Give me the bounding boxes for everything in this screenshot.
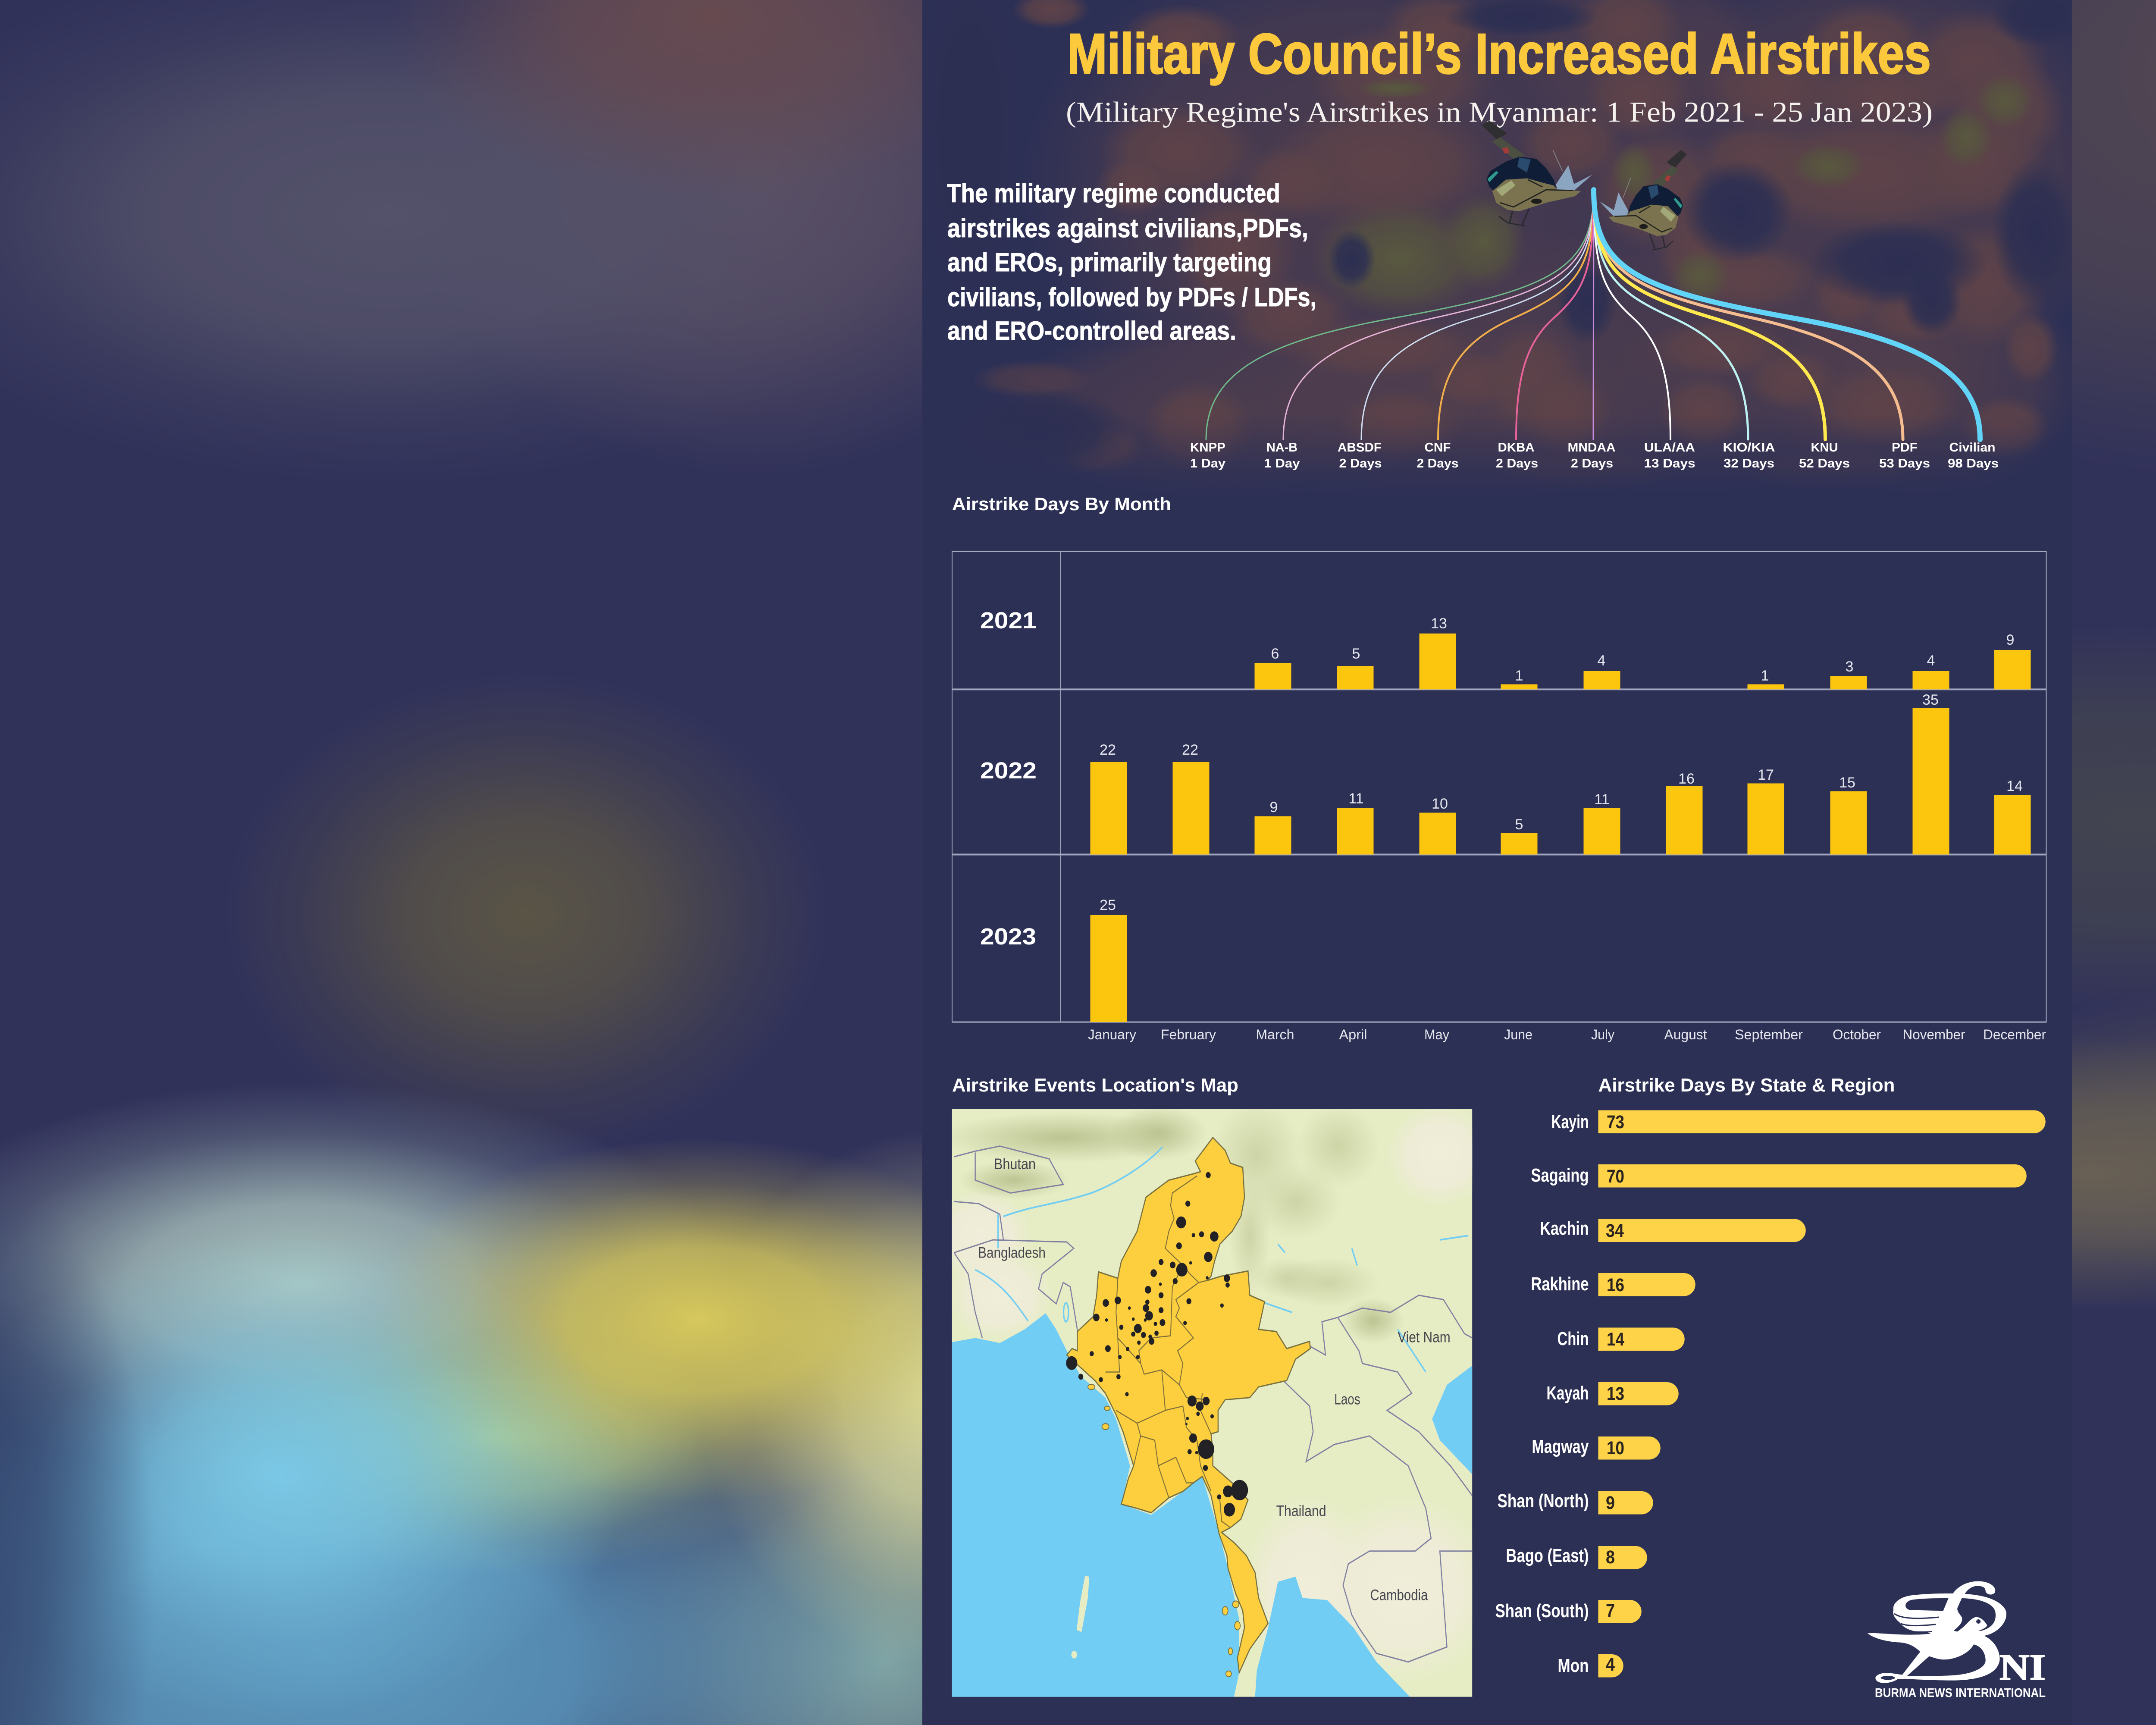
- bar value labels: 16: [1678, 771, 1695, 787]
- target labels: 1 Day: [1190, 457, 1225, 470]
- bar value labels: 22: [1182, 742, 1198, 758]
- target labels: 2 Days: [1417, 457, 1458, 470]
- target labels: 1 Day: [1264, 457, 1300, 470]
- map place labels: Cambodia: [1370, 1586, 1428, 1603]
- target labels: KNU: [1811, 441, 1838, 455]
- region labels: Sagaing: [1531, 1165, 1589, 1186]
- bar value labels: 5: [1515, 816, 1523, 833]
- month labels: [1088, 1027, 2046, 1042]
- bar value labels: 11: [1348, 790, 1364, 807]
- target labels: 32 Days: [1724, 457, 1774, 470]
- panel background: [922, 0, 2072, 1725]
- subtitle: (Military Regime's Airstrikes in Myanmar: 1 Feb 2021 - 25 Jan 2023): [1066, 96, 1933, 128]
- year labels: 2022: [980, 758, 1037, 784]
- bar value labels: 14: [2006, 778, 2023, 794]
- region labels: [1495, 1111, 1589, 1676]
- target labels: 52 Days: [1799, 457, 1850, 470]
- chart: airstrike days by state and region: [1495, 1110, 2046, 1678]
- cloud and fire backdrop: [918, 0, 2143, 513]
- map place labels: Thailand: [1276, 1502, 1326, 1519]
- bar values: 14: [1607, 1329, 1624, 1350]
- intro paragraph: civilians, followed by PDFs / LDFs,: [947, 282, 1316, 312]
- month labels: July: [1591, 1027, 1614, 1042]
- map place labels: [978, 1155, 1451, 1603]
- target labels: 53 Days: [1879, 457, 1930, 470]
- target labels: PDF: [1892, 441, 1918, 455]
- bars 2021: [1255, 634, 2031, 689]
- year labels: [980, 608, 1037, 950]
- seas: [952, 1313, 1472, 1697]
- region labels: Chin: [1557, 1328, 1589, 1349]
- bar values: 7: [1606, 1600, 1615, 1621]
- bar 2023: [1090, 915, 1127, 1022]
- bar value labels: 4: [1598, 652, 1605, 669]
- target labels: KIO/KIA: [1723, 441, 1775, 455]
- bar value labels: 3: [1846, 659, 1853, 675]
- bar value labels: 9: [2006, 632, 2014, 648]
- bar value labels: 15: [1839, 775, 1855, 791]
- bar values: 13: [1607, 1383, 1624, 1404]
- bar value labels: 17: [1758, 767, 1774, 783]
- heading: state and region: Airstrike Days By State & Region: [1598, 1075, 1895, 1096]
- target labels: KNPP: [1190, 441, 1225, 455]
- chart: airstrike days by month: [952, 551, 2046, 1042]
- bars 2022: [1090, 708, 2031, 855]
- blurred background: left side: [0, 0, 922, 1725]
- target labels: CNF: [1425, 441, 1451, 455]
- month labels: October: [1833, 1027, 1881, 1042]
- target labels: 13 Days: [1644, 457, 1695, 470]
- map place labels: Laos: [1334, 1390, 1360, 1408]
- target labels: MNDAA: [1568, 441, 1616, 455]
- icon: right helicopter: [1599, 150, 1687, 250]
- heading: map: Airstrike Events Location's Map: [952, 1075, 1238, 1096]
- bar values: 10: [1607, 1438, 1624, 1458]
- region labels: Shan (North): [1497, 1490, 1589, 1512]
- bar values: 4: [1606, 1654, 1615, 1675]
- bar values: 16: [1607, 1275, 1624, 1295]
- map place labels: Bangladesh: [978, 1244, 1046, 1261]
- region labels: Kayin: [1551, 1111, 1589, 1132]
- coastal islands: [1088, 1384, 1240, 1677]
- intro paragraph: and ERO-controlled areas.: [947, 316, 1236, 345]
- year labels: 2021: [980, 608, 1037, 634]
- month labels: January: [1088, 1027, 1136, 1042]
- myanmar state borders: [1106, 1176, 1230, 1527]
- region labels: Bago (East): [1506, 1545, 1589, 1566]
- bar values: 73: [1607, 1112, 1624, 1132]
- logo: Burma News International: [1868, 1581, 2046, 1700]
- bar value labels: 11: [1594, 791, 1610, 808]
- bar value labels: 13: [1431, 615, 1447, 632]
- month labels: February: [1161, 1027, 1216, 1042]
- target labels: 2 Days: [1496, 457, 1538, 470]
- month labels: May: [1424, 1027, 1449, 1042]
- target labels: DKBA: [1498, 441, 1535, 455]
- icon: left helicopter: [1482, 121, 1592, 226]
- rivers and lakes: [975, 1147, 1468, 1372]
- bar values: 34: [1606, 1220, 1624, 1241]
- bar value labels: 1: [1515, 668, 1523, 684]
- target labels: [1190, 441, 1999, 470]
- bar value labels: 10: [1432, 796, 1448, 812]
- flow lines from helicopters to targets: [1206, 190, 1980, 439]
- region labels: Kayah: [1546, 1383, 1589, 1404]
- neighbouring country borders: [954, 1146, 1472, 1662]
- month labels: November: [1902, 1027, 1965, 1042]
- map place labels: Bhutan: [994, 1155, 1036, 1173]
- target labels: 2 Days: [1571, 457, 1613, 470]
- bar value labels: 6: [1271, 646, 1279, 662]
- intro paragraph: airstrikes against civilians,PDFs,: [947, 213, 1308, 243]
- month labels: December: [1983, 1027, 2046, 1042]
- intro paragraph: The military regime conducted: [947, 179, 1280, 208]
- intro paragraph: [947, 179, 1316, 345]
- target labels: 2 Days: [1339, 457, 1382, 470]
- region labels: Magway: [1532, 1436, 1589, 1457]
- map: airstrike locations: [933, 1099, 1496, 1697]
- month labels: June: [1504, 1027, 1532, 1042]
- terrain shading: [933, 1099, 1496, 1683]
- islands: [1071, 1576, 1089, 1659]
- logo wordmark: BURMA NEWS INTERNATIONAL: [1875, 1686, 2046, 1700]
- icon: bird emblem: [1868, 1581, 2006, 1683]
- Myanmar: [1067, 1138, 1310, 1672]
- target labels: ABSDF: [1338, 441, 1382, 455]
- region labels: Mon: [1557, 1655, 1589, 1676]
- bar value labels: 25: [1100, 897, 1116, 913]
- bar values: 70: [1607, 1166, 1624, 1187]
- land base: [952, 1109, 1472, 1697]
- month labels: March: [1256, 1027, 1294, 1042]
- bar values: 9: [1606, 1493, 1615, 1513]
- map place labels: Viet Nam: [1398, 1328, 1451, 1346]
- year labels: 2023: [980, 924, 1036, 950]
- horizontal bars: [1598, 1110, 2046, 1678]
- region labels: Shan (South): [1495, 1600, 1589, 1622]
- bar value labels: 1: [1761, 668, 1769, 684]
- bar values: 8: [1606, 1547, 1615, 1568]
- blurred background: right side: [2072, 0, 2156, 1725]
- bar value labels: 5: [1352, 646, 1360, 662]
- region labels: Rakhine: [1531, 1273, 1589, 1295]
- bar value labels: 9: [1270, 799, 1278, 815]
- heading: airstrike days by month: Airstrike Days By Month: [952, 494, 1171, 514]
- logo letters: NI: [1999, 1647, 2046, 1688]
- month labels: August: [1664, 1027, 1707, 1042]
- target labels: NA-B: [1266, 441, 1297, 455]
- target labels: Civilian: [1949, 441, 1996, 455]
- month labels: September: [1735, 1027, 1803, 1042]
- bar value labels: 4: [1927, 652, 1935, 669]
- target labels: 98 Days: [1948, 457, 1999, 470]
- month labels: April: [1339, 1027, 1367, 1042]
- intro paragraph: and EROs, primarily targeting: [947, 248, 1272, 277]
- bar value labels: 35: [1922, 692, 1939, 708]
- region labels: Kachin: [1540, 1218, 1589, 1239]
- infographic panel: [947, 0, 2072, 1697]
- title: Military Council’s Increased Airstrikes: [1067, 22, 1931, 85]
- bar value labels: 22: [1100, 742, 1116, 758]
- bar value labels: [1100, 615, 2023, 913]
- target labels: ULA/AA: [1644, 441, 1695, 455]
- airstrike location dots: [1066, 1172, 1248, 1517]
- bar values: [1606, 1112, 1624, 1675]
